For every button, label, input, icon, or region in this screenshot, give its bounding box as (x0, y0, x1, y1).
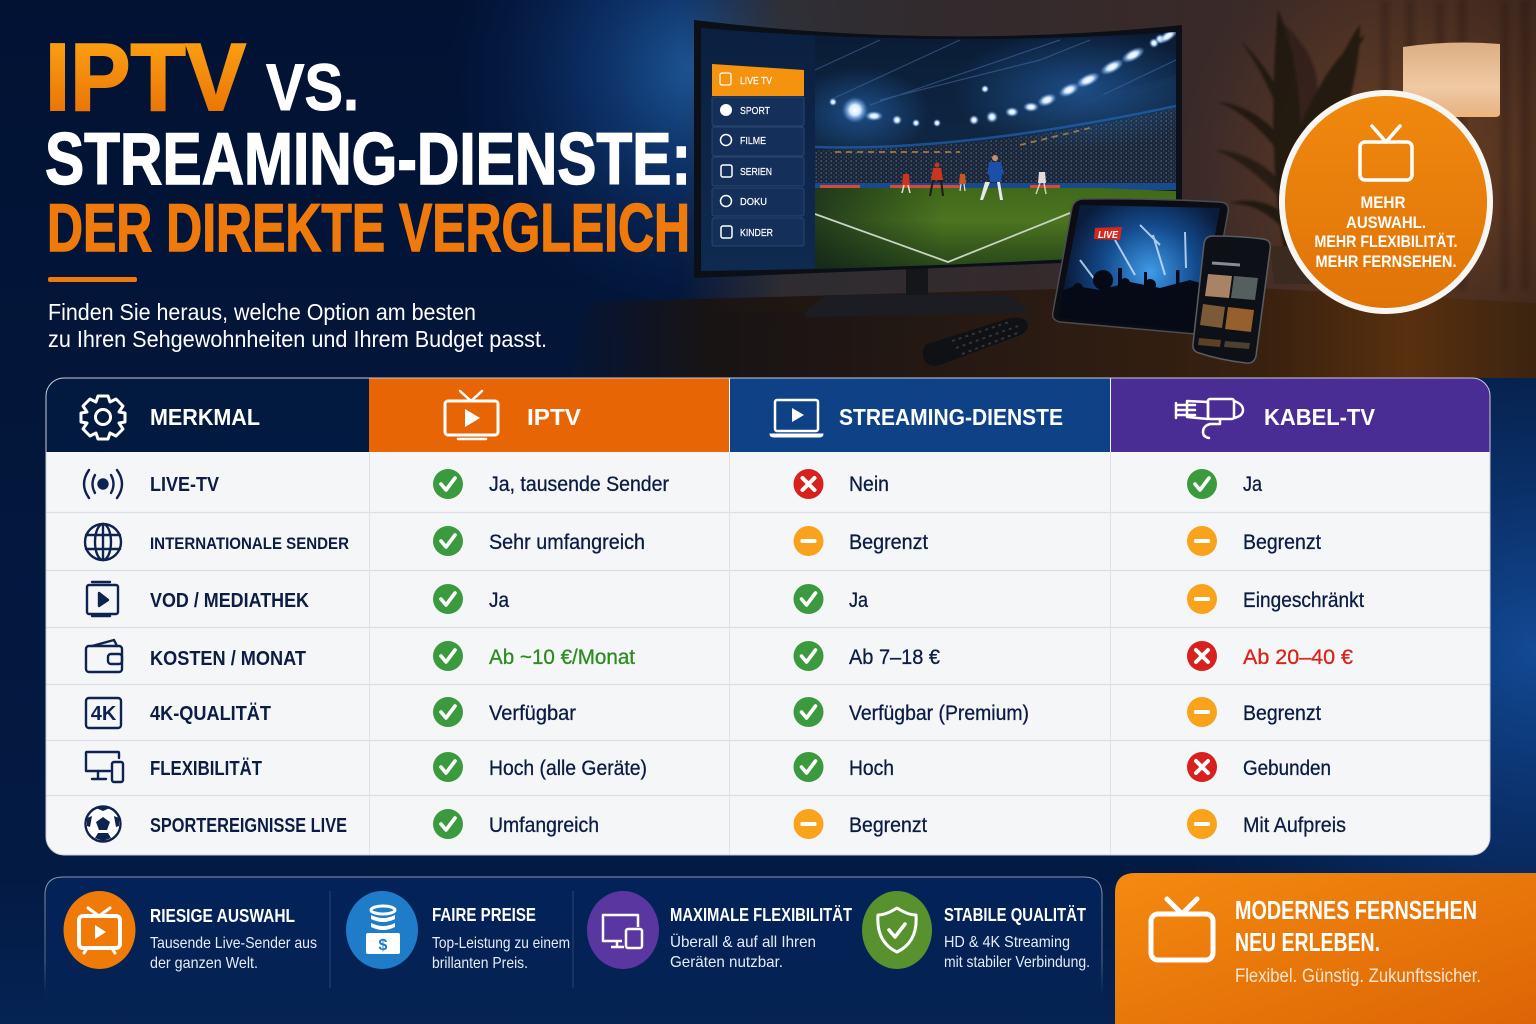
menu item: filme (712, 127, 804, 156)
row: internationale sender: Sehr umfangreich (489, 531, 645, 554)
benefit: faire preise: brillanten Preis. (432, 955, 528, 972)
icon: media library (87, 582, 118, 616)
benefit: maximale flexibilitaet: Geräten nutzbar. (670, 954, 783, 971)
menu item: kinder: KINDER (740, 228, 773, 239)
header: kabel-tv (1176, 399, 1376, 438)
subtitle: Finden Sie heraus, welche Option am besten (48, 299, 476, 325)
stadium lights (829, 25, 1181, 127)
badge text: MEHR FERNSEHEN. (1316, 252, 1456, 271)
row: sportereignisse live: Mit Aufpreis (1243, 814, 1346, 837)
benefit: faire preise (346, 891, 570, 972)
subtitle: zu Ihren Sehgewohnheiten und Ihrem Budget passt. (48, 326, 547, 352)
stadium haze (964, 37, 1176, 144)
badge text: AUSWAHL. (1346, 213, 1426, 232)
crowd (815, 108, 1176, 188)
benefit: faire preise: Top-Leistung zu einem (432, 935, 570, 952)
remote (923, 318, 1028, 366)
row: kosten / monat: Ab ~10 €/Monat (489, 646, 635, 669)
title: IPTV (45, 24, 246, 131)
menu item: sport: SPORT (740, 106, 770, 117)
panel: call to action: NEU ERLEBEN. (1235, 927, 1380, 957)
menu item: live tv: LIVE TV (740, 76, 772, 87)
phone (1193, 236, 1270, 363)
live badge (1094, 227, 1122, 241)
row: kosten / monat: Ab 20–40 € (1243, 646, 1353, 669)
row: 4k-qualitaet: Begrenzt (1243, 702, 1321, 725)
row: sportereignisse live: SPORTEREIGNISSE LIVE (150, 815, 347, 837)
icon: houseplant silhouette (1216, 10, 1370, 250)
panel: benefits (45, 877, 1102, 1000)
icon: tv (1151, 899, 1213, 960)
row: live-tv: Ja, tausende Sender (489, 473, 669, 496)
icon: coins and bill: $ (379, 937, 388, 954)
row: kosten / monat: KOSTEN / MONAT (150, 648, 306, 670)
title: DER DIREKTE VERGLEICH (47, 190, 690, 266)
benefit: maximale flexibilitaet: MAXIMALE FLEXIBILITÄT (670, 905, 852, 925)
benefit: riesige auswahl: RIESIGE AUSWAHL (150, 906, 295, 926)
row: 4k-qualitaet: 4K-QUALITÄT (150, 702, 271, 725)
benefit: maximale flexibilitaet: Überall & auf all Ihren (670, 933, 816, 951)
icon: plant pot (1270, 246, 1320, 284)
icon: shield (878, 908, 916, 952)
row: live-tv: LIVE-TV (150, 474, 220, 496)
live badge: LIVE (1098, 230, 1118, 241)
icon: cable connector (1176, 399, 1243, 438)
row: flexibilitaet: Hoch (alle Geräte) (489, 757, 647, 780)
row: internationale sender: INTERNATIONALE SENDER (150, 534, 349, 553)
menu item: live tv (712, 64, 804, 96)
benefit: stabile qualitaet: HD & 4K Streaming (944, 934, 1070, 951)
badge: mehr auswahl (1279, 90, 1493, 314)
row: sportereignisse live: Umfangreich (489, 814, 599, 837)
row: vod / mediathek: VOD / MEDIATHEK (150, 590, 309, 612)
row: vod / mediathek: Ja (489, 589, 509, 612)
badge text: MEHR FLEXIBILITÄT. (1314, 232, 1458, 251)
menu sidebar (701, 28, 815, 271)
icon: soccer ball (86, 806, 120, 842)
icon: 4k: 4K (91, 703, 117, 725)
stadium sky (815, 32, 1176, 150)
header: merkmal (81, 396, 260, 439)
panel: call to action: Flexibel. Günstig. Zukunftssicher. (1235, 966, 1481, 987)
row: flexibilitaet: Hoch (849, 757, 894, 780)
icon: 4k (86, 698, 121, 728)
title accent line (48, 277, 137, 282)
row: flexibilitaet: FLEXIBILITÄT (150, 757, 262, 780)
header cells (46, 378, 369, 452)
benefit: riesige auswahl: Tausende Live-Sender aus (150, 935, 317, 952)
benefit: stabile qualitaet (862, 891, 1090, 971)
benefit: faire preise: FAIRE PREISE (432, 905, 536, 925)
benefit: stabile qualitaet: mit stabiler Verbindung. (944, 954, 1090, 971)
crowd silhouettes (1058, 268, 1199, 332)
row: internationale sender: Begrenzt (1243, 531, 1321, 554)
icon: gear (81, 396, 125, 439)
benefit: maximale flexibilitaet (587, 891, 852, 971)
icon: lamp (1403, 43, 1500, 117)
field (815, 188, 1176, 269)
row: flexibilitaet (86, 752, 1331, 782)
header: iptv: IPTV (527, 404, 582, 430)
menu item: kinder (712, 218, 804, 246)
menu item: filme: FILME (740, 136, 766, 147)
ad board (815, 183, 1180, 190)
row: live-tv (84, 469, 1262, 499)
row: 4k-qualitaet: Verfügbar (489, 702, 576, 725)
menu item: doku: DOKU (740, 197, 767, 208)
menu item: serien (712, 157, 804, 186)
row: internationale sender (85, 524, 1321, 560)
icon: monitor and tablet (603, 915, 642, 948)
header: streaming-dienste (770, 400, 1063, 437)
row: live-tv: Nein (849, 473, 889, 496)
row: internationale sender: Begrenzt (849, 531, 928, 554)
row: sportereignisse live: Begrenzt (849, 814, 927, 837)
row: 4k-qualitaet (86, 697, 1321, 728)
icon: tv (1360, 126, 1412, 180)
icon: coins and bill (366, 906, 400, 954)
row: sportereignisse live (86, 806, 1346, 842)
icon: devices (86, 752, 123, 782)
title (45, 24, 691, 266)
menu item: serien: SERIEN (740, 167, 772, 178)
icon: laptop play (770, 400, 823, 437)
menu item: sport (712, 97, 804, 126)
icon: globe (85, 524, 121, 560)
tablet (1050, 199, 1230, 340)
row: 4k-qualitaet: Verfügbar (Premium) (849, 702, 1029, 725)
icon: broadcast (84, 470, 122, 498)
upper stand (1050, 80, 1176, 120)
tv stand (805, 268, 1027, 317)
badge text (1314, 193, 1458, 271)
row: kosten / monat (86, 640, 1353, 672)
roof struts (815, 40, 1176, 106)
row: vod / mediathek: Ja (849, 589, 868, 612)
title: VS. (266, 50, 359, 124)
icon: tv (79, 908, 120, 953)
title: STREAMING-DIENSTE: (45, 119, 691, 200)
badge text: MEHR (1360, 193, 1406, 212)
benefit: stabile qualitaet: STABILE QUALITÄT (944, 905, 1086, 925)
row: vod / mediathek (87, 582, 1364, 616)
icon: wallet (86, 640, 122, 672)
subtitle (48, 299, 547, 352)
comparison table (46, 378, 1490, 855)
row: flexibilitaet: Gebunden (1243, 757, 1331, 780)
header: kabel-tv: KABEL-TV (1264, 404, 1376, 430)
menu item: doku (712, 188, 804, 216)
benefit: riesige auswahl: der ganzen Welt. (150, 955, 258, 972)
icon: tv play (445, 391, 498, 439)
header: merkmal: MERKMAL (150, 404, 260, 430)
panel: call to action (1115, 873, 1536, 1024)
tv with stadium and menu (694, 20, 1210, 280)
row: vod / mediathek: Eingeschränkt (1243, 589, 1364, 612)
header: iptv (445, 391, 582, 439)
row: kosten / monat: Ab 7–18 € (849, 646, 940, 669)
benefit: riesige auswahl (64, 891, 317, 972)
row: live-tv: Ja (1243, 473, 1262, 496)
players (902, 155, 1046, 200)
header: streaming-dienste: STREAMING-DIENSTE (839, 404, 1063, 430)
